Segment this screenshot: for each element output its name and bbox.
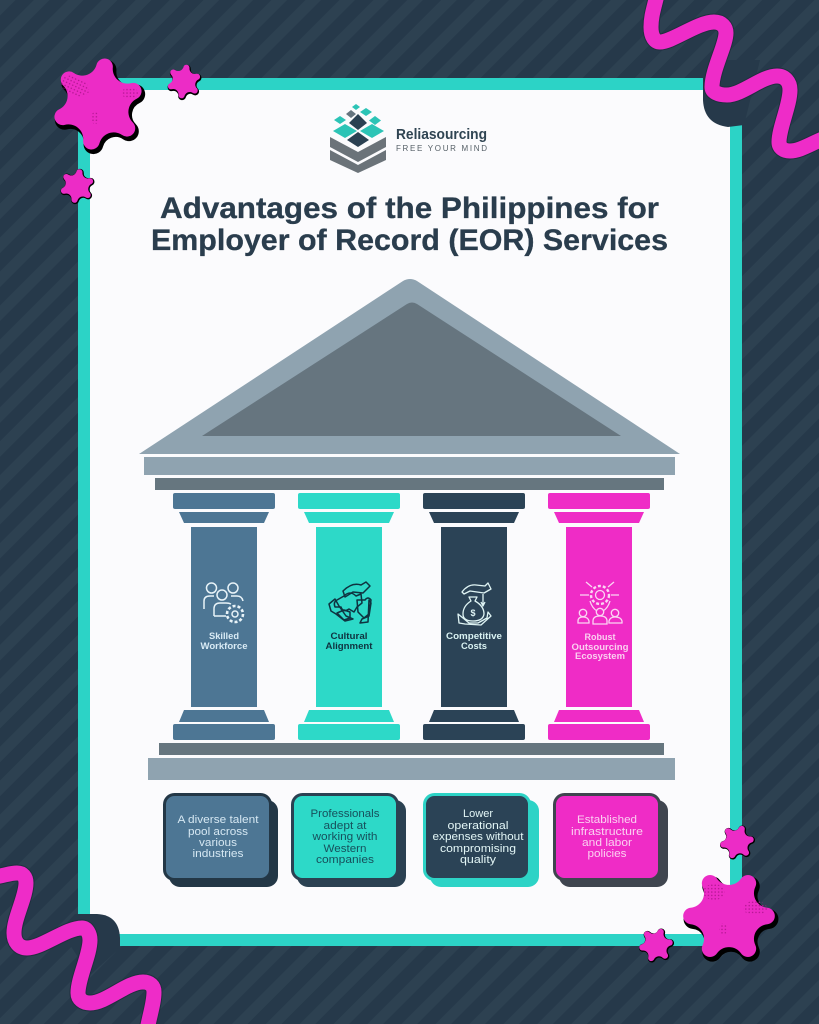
title: Employer of Record (EOR) Services [151, 224, 668, 257]
title [151, 192, 668, 257]
label: competitive costs: Competitive [446, 631, 502, 642]
label: competitive costs: Costs [461, 641, 487, 652]
pillar: robust outsourcing ecosystem [548, 493, 650, 740]
star: small right [718, 824, 757, 860]
pink squiggle: top right [651, 0, 819, 151]
card text: A diverse talent [178, 814, 258, 826]
label: skilled workforce: Workforce [200, 641, 248, 652]
logo wordmark: Reliasourcing [396, 126, 487, 143]
dark corner notch: bottom left [60, 914, 120, 975]
star: large top left [41, 50, 157, 161]
label: robust outsourcing ecosystem: Robust [584, 632, 616, 643]
card text: Professionals [310, 808, 380, 820]
icon: dollar sign: $ [470, 608, 476, 618]
title: Advantages of the Philippines for [160, 192, 659, 225]
temple roof [139, 279, 680, 454]
label: robust outsourcing ecosystem: Ecosystem [575, 651, 625, 662]
logo icon: stacked layers [330, 104, 386, 173]
label: cultural alignment: Cultural [330, 631, 368, 642]
star: small left [56, 166, 99, 207]
pillar: competitive costs [423, 493, 525, 740]
card text: policies [588, 848, 627, 860]
card text: Lower [463, 808, 493, 820]
logo [330, 104, 487, 173]
card text: compromising [440, 843, 516, 855]
logo tagline: FREE YOUR MIND [396, 144, 487, 153]
icon: hands with money bag [458, 583, 491, 625]
card text: adept at [324, 820, 366, 832]
dark corner notch: top right [703, 60, 760, 127]
label: cultural alignment: Alignment [326, 641, 373, 652]
card text: operational [448, 820, 508, 832]
teal frame with white panel [78, 78, 742, 946]
card: lower expenses [424, 794, 539, 887]
star: small top [163, 61, 206, 103]
star: small bottom [637, 927, 676, 963]
card text: working with [311, 831, 378, 843]
card text: various [199, 837, 238, 849]
icon: gear, people and arrows [578, 582, 622, 624]
card text: companies [316, 854, 375, 866]
card text: Established [577, 814, 637, 826]
card text: quality [460, 854, 497, 866]
pink squiggle: bottom left [0, 873, 154, 1024]
icon: hands with puzzle pieces [329, 582, 371, 623]
card: western companies [292, 794, 406, 887]
card text: infrastructure [571, 826, 643, 838]
entablature [144, 457, 675, 490]
card: established infrastructure [554, 794, 668, 887]
pillar: cultural alignment [298, 493, 400, 740]
label: skilled workforce: Skilled [209, 631, 239, 642]
temple base steps [148, 743, 675, 780]
card text: expenses without [432, 831, 524, 843]
card: diverse talent pool [164, 794, 278, 887]
icon: people with gear [204, 583, 243, 622]
pillar: skilled workforce [173, 493, 275, 740]
star: large bottom right [683, 875, 777, 960]
card text: and labor [582, 837, 632, 849]
label: robust outsourcing ecosystem: Outsourcing [572, 642, 629, 653]
card text: pool across [188, 826, 249, 838]
card text: industries [192, 848, 244, 860]
card text: Western [324, 843, 366, 855]
